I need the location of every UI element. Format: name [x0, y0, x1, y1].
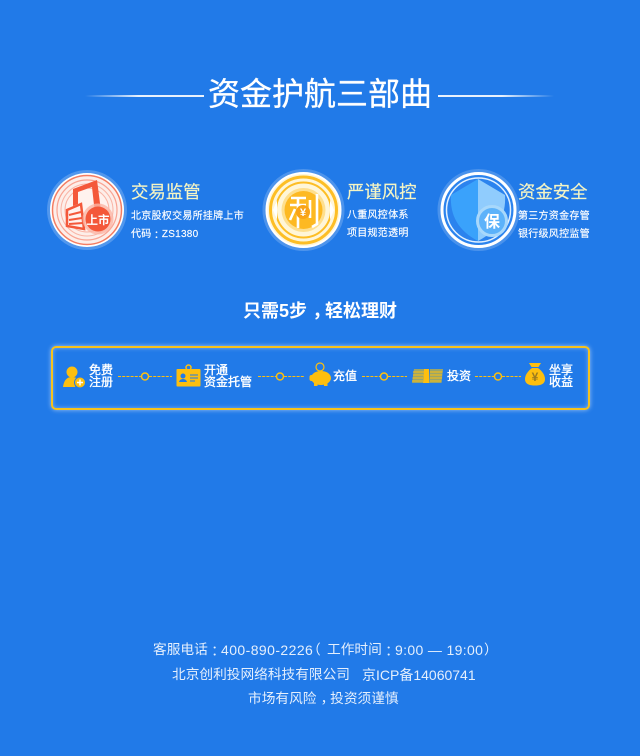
footer: contact: ： [385, 643, 399, 658]
connector 4 [475, 372, 521, 381]
panel: five steps [51, 346, 590, 410]
exchange text: 北京股权交易所挂牌上市 [131, 211, 244, 222]
connector 3 [362, 372, 407, 381]
footer: contact [153, 642, 498, 658]
exchange heading: 交易监管 [131, 182, 201, 202]
step: earn: 收益 [549, 375, 573, 389]
footer: company [172, 667, 476, 683]
connector 2 [258, 372, 304, 381]
footer: company: 北京创利投网络科技有限公司 [172, 667, 350, 682]
safety text [518, 210, 590, 240]
icon: money bag [525, 363, 545, 386]
icon: shield [438, 169, 520, 251]
icon: gold coin [262, 169, 344, 251]
footer: risk notice: 市场有风险 投资须谨慎 [248, 691, 399, 706]
icon: register [63, 366, 85, 388]
footer: contact: ） [484, 642, 498, 657]
risk text [347, 209, 409, 239]
exchange text: ： [154, 230, 164, 241]
icon: listed building [47, 170, 127, 250]
icon: gold coin: ¥ [300, 207, 307, 219]
title right line [438, 95, 554, 97]
step: earn [549, 363, 573, 389]
footer: contact: ： [211, 643, 225, 658]
step: top up: 充值 [333, 369, 357, 383]
footer: contact: 客服电话 [153, 642, 208, 657]
footer: company: 京ICP备14060741 [362, 667, 476, 683]
title: 资金护航三部曲 [208, 76, 432, 112]
icon: custody card [176, 364, 200, 386]
icon: listed building: 上市 [86, 213, 110, 227]
step: invest: 投资 [447, 369, 471, 383]
safety text: 第三方资金存管 [518, 211, 590, 222]
step: custody [204, 363, 252, 389]
subheading: 只需5步 轻松理财 [243, 301, 397, 321]
icon: piggy bank [310, 362, 331, 386]
connector 1 [118, 372, 172, 381]
risk heading: 严谨风控 [347, 182, 417, 202]
footer: contact: （ [307, 642, 321, 657]
footer: risk notice: ， [321, 691, 334, 706]
step: earn: 坐享 [549, 363, 573, 377]
icon: shield: 保 [484, 213, 500, 231]
safety heading: 资金安全 [518, 182, 588, 202]
footer: contact: 工作时间 [327, 642, 382, 657]
step: register [89, 363, 113, 389]
step: custody: 开通 [204, 363, 228, 377]
step: register: 注册 [89, 375, 113, 389]
exchange text [131, 210, 244, 241]
title left line [85, 95, 204, 97]
subheading: ， [312, 301, 330, 321]
risk text: 项目规范透明 [347, 228, 409, 239]
step: register: 免费 [89, 363, 113, 377]
icon: banknotes [412, 369, 443, 383]
footer: contact: 400-890-2226 [221, 642, 313, 658]
safety text: 银行级风控监管 [518, 229, 590, 240]
exchange text: 代码 ZS1380 [131, 229, 198, 240]
step: custody: 资金托管 [204, 375, 252, 389]
icon: money bag: ¥ [532, 370, 539, 384]
footer: contact: 9:00 — 19:00 [395, 642, 483, 658]
risk text: 八重风控体系 [347, 210, 409, 221]
